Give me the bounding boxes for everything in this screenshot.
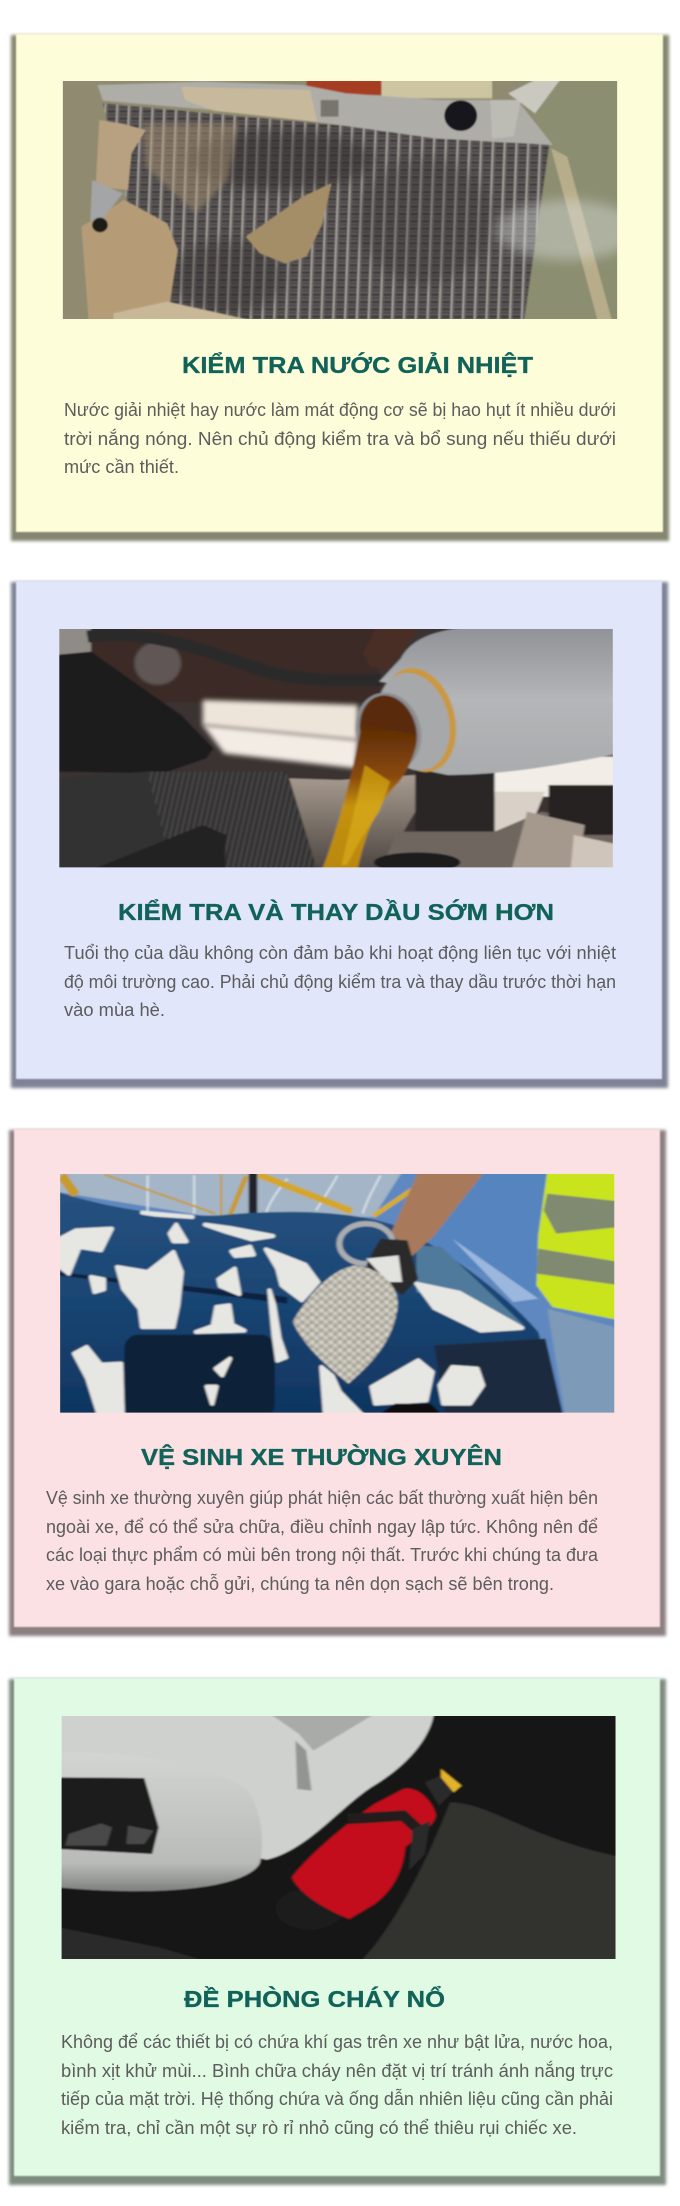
panel frame [11, 581, 668, 1088]
body text: các loại thực phẩm có mùi bên trong nội thất. Trước khi chúng ta đưa [46, 1544, 599, 1565]
panel: coolant check [11, 34, 669, 541]
body text: mức cần thiết. [64, 456, 179, 477]
body text: trời nắng nóng. Nên chủ động kiểm tra và bổ sung nếu thiếu dưới [64, 428, 616, 449]
body text: Không để các thiết bị có chứa khí gas trên xe như bật lửa, nước hoa, [61, 2031, 613, 2052]
body text: Vệ sinh xe thường xuyên giúp phát hiện các bất thường xuất hiện bên [46, 1487, 598, 1508]
body text [64, 942, 616, 1020]
panel: washing the car [9, 1129, 666, 1636]
photo: pouring engine oil [59, 629, 613, 868]
body text: xe vào gara hoặc chỗ gửi, chúng ta nên dọn sạch sẽ bên trong. [46, 1573, 554, 1594]
heading: KIỂM TRA NƯỚC GIẢI NHIỆT [182, 350, 533, 378]
panel frame [11, 34, 669, 541]
body text: vào mùa hè. [64, 999, 165, 1020]
body text: tiếp của mặt trời. Hệ thống chứa và ống dẫn nhiên liệu cũng cần phải [61, 2088, 613, 2109]
photo: fire extinguisher beside car seat [62, 1716, 616, 1959]
photo: washing a blue car [60, 1174, 614, 1413]
body text: ngoài xe, để có thể sửa chữa, điều chỉnh ngay lập tức. Không nên để [46, 1516, 598, 1537]
panel frame [9, 1129, 666, 1636]
panel: fire prevention [9, 1678, 666, 2185]
panel: engine oil [11, 581, 668, 1088]
body text: kiểm tra, chỉ cần một sự rò rỉ nhỏ cũng có thể thiêu rụi chiếc xe. [61, 2117, 577, 2138]
photo: radiator being sprayed [62, 81, 618, 319]
body text [46, 1487, 599, 1594]
body text: bình xịt khử mùi... Bình chữa cháy nên đặt vị trí tránh ánh nắng trực [61, 2060, 613, 2081]
body text [64, 399, 616, 477]
heading: KIỂM TRA VÀ THAY DẦU SỚM HƠN [118, 898, 554, 925]
body text [61, 2031, 613, 2138]
body text: độ môi trường cao. Phải chủ động kiểm tra và thay dầu trước thời hạn [64, 971, 616, 992]
body text: Tuổi thọ của dầu không còn đảm bảo khi hoạt động liên tục với nhiệt [64, 942, 616, 963]
heading: ĐỀ PHÒNG CHÁY NỔ [184, 1985, 445, 2012]
panel frame [9, 1678, 666, 2185]
body text: Nước giải nhiệt hay nước làm mát động cơ sẽ bị hao hụt ít nhiều dưới [64, 399, 616, 420]
heading: VỆ SINH XE THƯỜNG XUYÊN [141, 1443, 502, 1470]
